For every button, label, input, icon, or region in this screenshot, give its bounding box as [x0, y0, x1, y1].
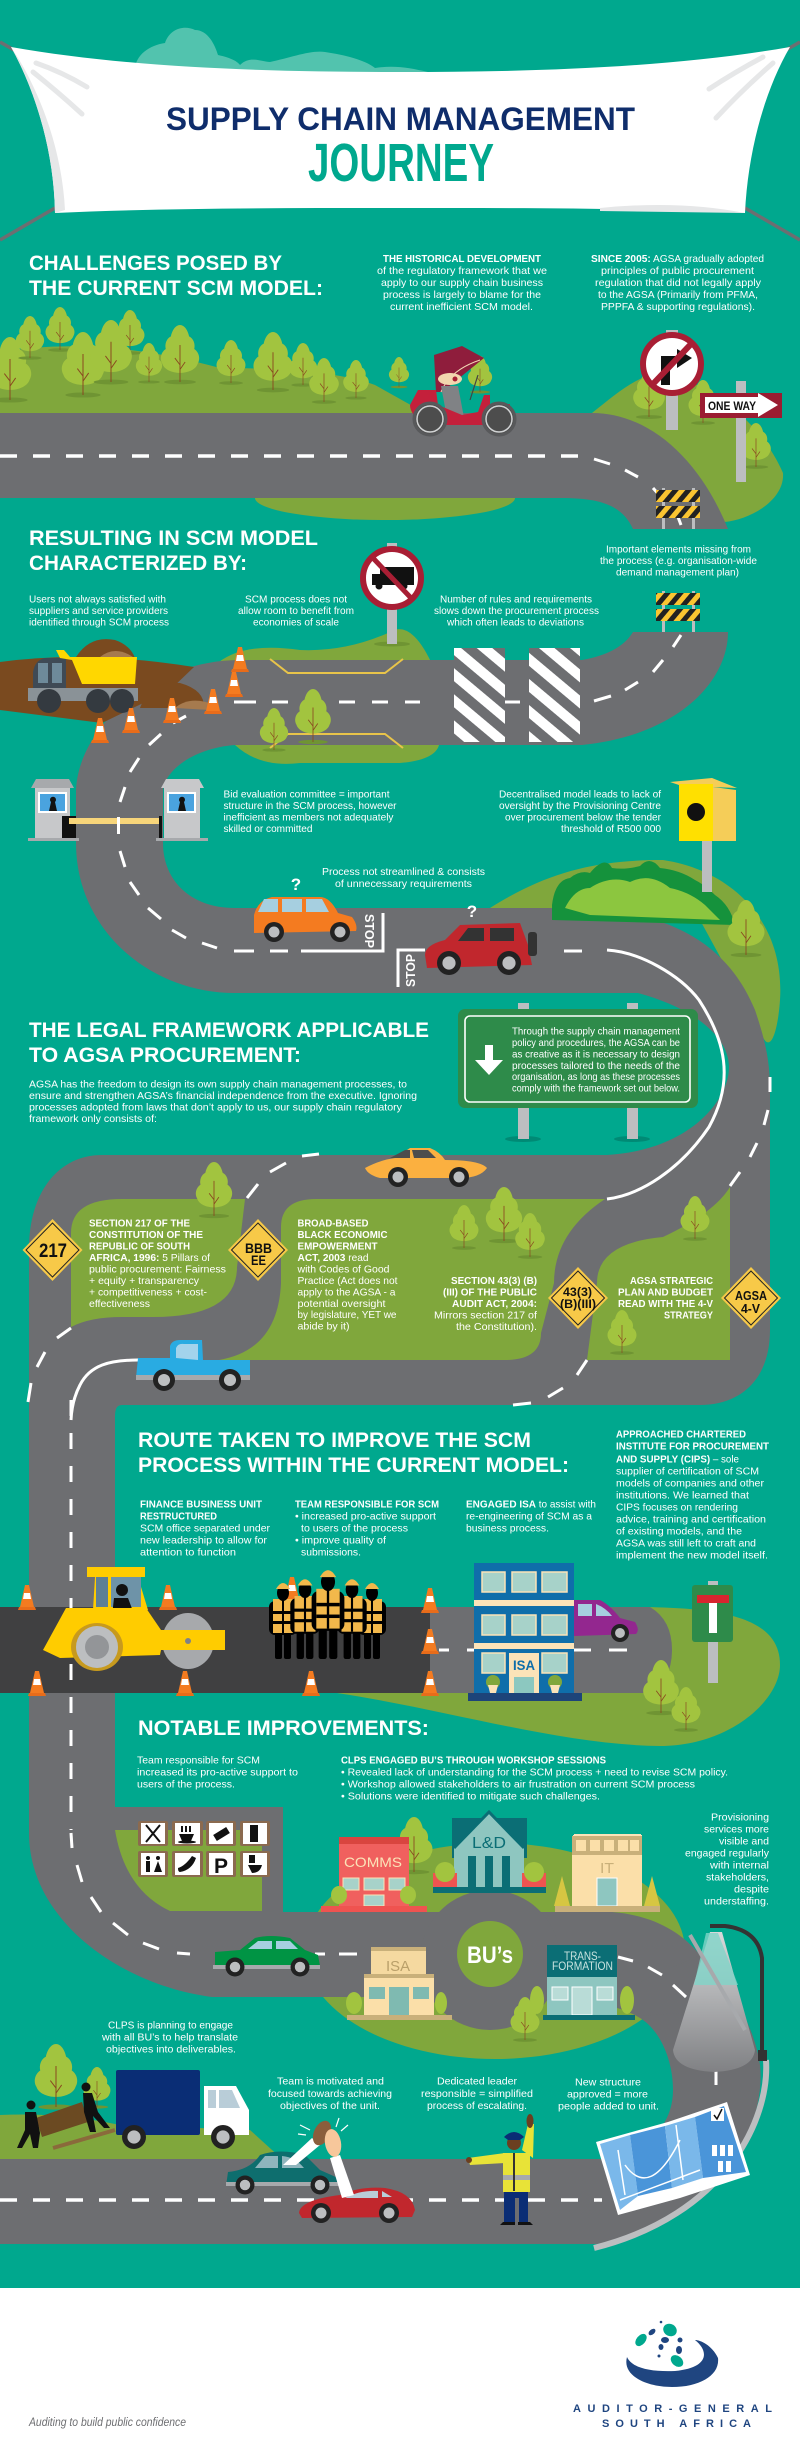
text: section 217: + competitiveness + cost-: [89, 1286, 207, 1298]
text: dedicated leader: process of escalating.: [427, 2100, 527, 2112]
text: missing elements: demand management plan): [616, 566, 739, 578]
text: decentralised: oversight by the Provisioning Centre: [499, 800, 661, 812]
text: CLPS planning: with all BU’s to help translate: [101, 2032, 238, 2044]
text: bid evaluation: inefficient as members not adequately: [224, 812, 394, 824]
text: team responsible: to users of the process: [301, 1522, 408, 1534]
green road sign: organisation, as long as these processes: [512, 1071, 680, 1083]
title: SUPPLY CHAIN MANAGEMENT: [166, 101, 635, 137]
text: economies: allow room to benefit from: [238, 605, 354, 617]
green road sign: comply with the framework set out below.: [512, 1082, 680, 1094]
text: BBBEE: BLACK ECONOMIC: [298, 1229, 388, 1241]
text: engaged ISA: [466, 1498, 596, 1534]
text: BBBEE: with Codes of Good: [297, 1264, 390, 1276]
diamond sign: AGSA 4-V: 4-V: [741, 1302, 761, 1316]
text: rules: slows down the procurement process: [434, 605, 599, 617]
text: section 43: Mirrors section 217 of: [434, 1310, 537, 1322]
diamond sign: BBBEE: EE: [251, 1252, 266, 1268]
text: CIPS: [616, 1428, 770, 1562]
BU's circle: [457, 1921, 523, 1987]
logo text: AUDITOR-GENERAL: [573, 2403, 772, 2415]
text: team responsible: • increased pro-active support: [295, 1510, 436, 1522]
text: workshop sessions: • Solutions were identified to mitigate such challenges.: [341, 1790, 600, 1802]
text: new structure: approved = more: [567, 2088, 648, 2100]
service icons: [138, 1821, 270, 1878]
text: section 217: + equity + transparency: [89, 1275, 200, 1287]
road repair stretch: [0, 1607, 430, 1693]
text: finance unit: [140, 1498, 270, 1558]
clouds: [135, 28, 428, 72]
heading: route taken: ROUTE TAKEN TO IMPROVE THE SCM: [138, 1428, 531, 1452]
diamond sign: AGSA 4-V: [721, 1267, 781, 1329]
text: since 2005: to the AGSA (Primarily from PFMA,: [598, 289, 758, 301]
heading: challenges: [29, 251, 323, 300]
text: team responsible: [295, 1498, 439, 1558]
text: not streamlined: [322, 866, 485, 890]
red jeep: ?: [467, 902, 477, 921]
ISA building: ISA: [513, 1657, 535, 1673]
text: section 43: the Constitution).: [456, 1321, 537, 1333]
stop markings: [362, 914, 418, 987]
text: CIPS: implement the new model itself.: [616, 1550, 768, 1562]
text: bid evaluation: skilled or committed: [224, 823, 313, 835]
text: bid evaluation: [224, 788, 397, 835]
text: workshop sessions: • Workshop allowed stakeholders to air frustration on current SCM process: [341, 1778, 695, 1790]
text: AGSA freedom: processes adopted from laws that don’t apply to us, our supply chain regulatory: [29, 1102, 403, 1114]
diamond sign: BBBEE: [228, 1219, 288, 1281]
text: BBBEE: EMPOWERMENT: [298, 1240, 378, 1252]
text: finance unit: new leadership to allow for: [140, 1534, 268, 1546]
pedestrian crossings: [454, 648, 580, 742]
text: provisioning: despite: [734, 1884, 769, 1896]
text: missing elements: Important elements missing from: [606, 544, 751, 556]
heading: notable improvements: NOTABLE IMPROVEMENTS:: [138, 1716, 429, 1740]
text: not streamlined: Process not streamlined & consists: [322, 866, 485, 878]
text: workshop sessions: CLPS ENGAGED BU’S THROUGH WORKSHOP SESSIONS: [341, 1754, 606, 1766]
yellow sports car: [365, 1148, 487, 1187]
text: economies: [238, 594, 354, 628]
street light: [673, 1926, 767, 2072]
speed camera: [670, 778, 737, 892]
text: engaged ISA: re-engineering of SCM as a: [466, 1510, 592, 1522]
L&D building: [433, 1812, 546, 1893]
heading: challenges: CHALLENGES POSED BY: [29, 251, 282, 275]
text: CIPS: models of companies and other: [616, 1478, 764, 1490]
rickshaw: [410, 346, 515, 435]
text: workshop sessions: [341, 1754, 728, 1802]
text: bid evaluation: structure in the SCM process, however: [224, 800, 397, 812]
orange car: ?: [291, 875, 301, 894]
text: BBBEE: by legislature, YET we: [298, 1309, 397, 1321]
ISA small building: ISA: [386, 1958, 410, 1975]
text: CIPS: institutions. We learned that: [616, 1490, 749, 1502]
logo text: [573, 2403, 772, 2430]
text: AGSA strategic plan: AGSA STRATEGIC: [630, 1275, 713, 1287]
road roller: [43, 1567, 225, 1671]
sign: one way: [700, 381, 782, 482]
text: team responsible support: increased its pro-active support to: [137, 1766, 298, 1778]
BU's circle: BU’s: [467, 1942, 513, 1969]
trees: delivery: [35, 2044, 110, 2110]
text: finance unit: RESTRUCTURED: [140, 1510, 217, 1522]
L&D building: L&D: [472, 1835, 506, 1852]
text: historical development: current inefficient SCM model.: [390, 301, 533, 313]
text: historical development: process is largely to blame for the: [383, 289, 541, 301]
trees: right of repair road: [643, 1660, 700, 1732]
road markings: [0, 456, 770, 2200]
tagline: Auditing to build public confidence: [28, 2417, 186, 2429]
logo: [626, 2321, 718, 2387]
text: bid evaluation: Bid evaluation committee = important: [224, 788, 390, 800]
text: section 217: CONSTITUTION OF THE: [89, 1229, 203, 1241]
text: team motivated: objectives of the unit.: [280, 2100, 380, 2112]
text: provisioning: visible and: [719, 1836, 769, 1848]
text: historical development: THE HISTORICAL DEVELOPMENT: [383, 253, 542, 265]
sign: no trucks: [363, 543, 421, 646]
COMMS building: COMMS: [344, 1854, 402, 1870]
text: team responsible support: Team responsible for SCM: [137, 1754, 260, 1766]
text: decentralised: threshold of R500 000: [561, 823, 661, 835]
text: provisioning: engaged regularly: [685, 1848, 770, 1860]
high five hands: [283, 2118, 354, 2198]
text: AGSA strategic plan: [618, 1275, 714, 1322]
text: CLPS planning: CLPS is planning to engage: [108, 2020, 233, 2032]
toll booths: [28, 779, 208, 841]
sign: no right turn: [643, 330, 701, 430]
text: team responsible: submissions.: [301, 1546, 361, 1558]
text: finance unit: attention to function: [140, 1546, 236, 1558]
text: new structure: New structure: [575, 2076, 641, 2088]
green road sign: [458, 1003, 698, 1142]
text: finance unit: FINANCE BUSINESS UNIT: [140, 1498, 263, 1510]
green road sign: policy and procedures, the AGSA can be: [512, 1037, 680, 1049]
green road sign: processes tailored to the needs of the: [512, 1060, 680, 1072]
heading: resulting: RESULTING IN SCM MODEL: [29, 526, 318, 550]
diamond sign: 217: [22, 1219, 82, 1281]
text: historical development: of the regulatory framework that we: [377, 265, 547, 277]
IT building: IT: [600, 1860, 614, 1877]
dump truck: [28, 639, 138, 713]
text: section 43: AUDIT ACT, 2004:: [452, 1298, 537, 1310]
blue pickup: [136, 1340, 250, 1391]
text: BBBEE: BROAD-BASED: [298, 1218, 369, 1230]
text: rules: [434, 594, 599, 628]
text: AGSA freedom: framework only consists of:: [29, 1113, 157, 1125]
teal car: [226, 2152, 339, 2194]
bushes: [552, 861, 735, 925]
text: team motivated: Team is motivated and: [277, 2076, 384, 2088]
text: section 43: (III) OF THE PUBLIC: [443, 1286, 537, 1298]
text: CLPS planning: [101, 2020, 238, 2056]
text: CLPS planning: objectives into deliverables.: [106, 2044, 236, 2056]
text: BBBEE: abide by it): [298, 1320, 350, 1332]
text: BBBEE: [297, 1218, 398, 1332]
road: first stretch: [0, 413, 728, 529]
text: historical development: [377, 253, 547, 313]
diamond sign: AGSA 4-V: AGSA: [735, 1289, 767, 1303]
diamond sign: 217: 217: [39, 1241, 67, 1262]
text: users: [29, 594, 169, 628]
construction workers: [269, 1570, 386, 1659]
title: JOURNEY: [308, 133, 494, 193]
green road sign: Through the supply chain management: [512, 1026, 680, 1038]
text: since 2005: regulation that did not legally apply: [595, 277, 762, 289]
text: rules: which often leads to deviations: [446, 616, 584, 628]
heading: route taken: [138, 1428, 569, 1477]
cones: road repair: [18, 1577, 439, 1696]
heading: challenges: THE CURRENT SCM MODEL:: [29, 276, 323, 300]
orange car: [254, 875, 356, 942]
text: users: identified through SCM process: [29, 616, 169, 628]
red sports car: [299, 2188, 415, 2223]
text: decentralised: Decentralised model leads to lack of: [499, 788, 661, 800]
text: provisioning: stakeholders,: [706, 1872, 769, 1884]
ISA small building: [346, 1947, 452, 2020]
heading: legal framework: THE LEGAL FRAMEWORK APPLICABLE: [29, 1018, 429, 1042]
BU ring road: [420, 1890, 720, 2030]
text: CIPS: AGSA was still left to craft and: [616, 1538, 756, 1550]
Transformation building: FORMATION: [552, 1961, 613, 1973]
heading: legal framework: [29, 1018, 429, 1067]
text: CIPS: of existing models, and the: [616, 1526, 742, 1538]
title: [166, 101, 635, 193]
trees: first section: [0, 307, 771, 469]
text: provisioning: understaffing.: [704, 1896, 769, 1908]
text: dedicated leader: responsible = simplified: [421, 2088, 533, 2100]
ISA building: [468, 1563, 582, 1701]
text: section 217: [89, 1218, 226, 1310]
text: section 217: effectiveness: [89, 1298, 150, 1310]
purple car: [574, 1600, 638, 1642]
text: engaged ISA: business process.: [466, 1522, 549, 1534]
text: section 43: SECTION 43(3) (B): [451, 1275, 537, 1287]
text: new structure: [558, 2076, 659, 2112]
text: engaged ISA: ENGAGED ISA to assist with: [466, 1498, 596, 1510]
text: new structure: people added to unit.: [558, 2100, 659, 2112]
text: dedicated leader: Dedicated leader: [437, 2076, 518, 2088]
diamond sign: 43(3): 43(3): [563, 1285, 592, 1299]
text: decentralised: over procurement below the tender: [505, 812, 661, 824]
text: workshop sessions: • Revealed lack of understanding for the SCM process + need to revise SCM policy.: [341, 1766, 728, 1778]
sign: one way: ONE WAY: [708, 399, 756, 413]
text: AGSA strategic plan: PLAN AND BUDGET: [618, 1286, 714, 1298]
text: AGSA freedom: AGSA has the freedom to design its own supply chain management processes, to: [29, 1078, 407, 1090]
trees on median: [260, 689, 331, 752]
text: team responsible: • improve quality of: [295, 1534, 386, 1546]
text: section 217: SECTION 217 OF THE: [89, 1218, 190, 1230]
map: [596, 2102, 750, 2215]
logo text: SOUTH AFRICA: [602, 2418, 751, 2430]
text: dedicated leader: [421, 2076, 533, 2112]
text: AGSA strategic plan: READ WITH THE 4-V: [618, 1298, 713, 1310]
text: not streamlined: of unnecessary requirements: [335, 878, 472, 890]
text: since 2005: SINCE 2005: AGSA gradually adopted: [591, 253, 764, 265]
service icons: P: [214, 1855, 228, 1878]
text: CIPS: INSTITUTE FOR PROCUREMENT: [616, 1440, 770, 1452]
cones: roadworks: [91, 647, 249, 743]
road sign with no entry bar: [692, 1581, 733, 1683]
text: missing elements: the process (e.g. organisation-wide: [600, 555, 757, 567]
text: BBBEE: apply to the AGSA - a: [298, 1286, 396, 1298]
text: provisioning: [685, 1812, 770, 1908]
heading: legal framework: TO AGSA PROCUREMENT:: [29, 1043, 301, 1067]
text: team responsible support: [137, 1754, 298, 1790]
red jeep: [425, 902, 537, 975]
text: economies: economies of scale: [253, 616, 339, 628]
Transformation building: [530, 1945, 635, 2020]
text: BBBEE: Practice (Act does not: [298, 1275, 398, 1287]
heading: route taken: PROCESS WITHIN THE CURRENT MODEL:: [138, 1453, 569, 1477]
text: BBBEE: ACT, 2003 read: [298, 1252, 369, 1264]
traffic officer: [466, 2114, 534, 2225]
text: missing elements: [600, 544, 757, 578]
text: team motivated: [268, 2076, 392, 2112]
text: BBBEE: potential oversight: [298, 1298, 386, 1310]
text: CIPS: advice, training and certification: [616, 1514, 766, 1526]
green hills under roads: [0, 346, 783, 2160]
stop markings: STOP: [404, 954, 418, 987]
text: AGSA freedom: ensure and strengthen AGSA’s financial independence from the executive. Ignoring: [29, 1090, 417, 1102]
text: decentralised: [499, 788, 661, 835]
text: provisioning: with internal: [709, 1860, 769, 1872]
COMMS building: [321, 1817, 433, 1912]
text: AGSA freedom: [29, 1078, 417, 1125]
text: users: Users not always satisfied with: [29, 594, 166, 606]
text: CIPS: AND SUPPLY (CIPS) – sole: [616, 1454, 739, 1466]
banner: [0, 42, 800, 240]
green road sign: as creative as it is necessary to design: [512, 1048, 680, 1060]
delivery truck with movers: [17, 2070, 249, 2149]
green car: [213, 1936, 320, 1976]
diamond sign: BBBEE: BBB: [245, 1240, 272, 1256]
dirt: [0, 657, 215, 723]
text: since 2005: principles of public procurement: [601, 265, 754, 277]
trees: legal framework: [196, 1162, 709, 1355]
stop markings: STOP: [362, 914, 376, 948]
text: economies: SCM process does not: [245, 594, 347, 606]
text: section 43: [434, 1275, 537, 1333]
text: finance unit: SCM office separated under: [140, 1522, 270, 1534]
heading: resulting: CHARACTERIZED BY:: [29, 551, 247, 575]
text: since 2005: PPPFA & supporting regulations).: [601, 301, 755, 313]
road block 2: [656, 591, 700, 632]
text: provisioning: services more: [704, 1824, 769, 1836]
IT building: [554, 1835, 660, 1912]
diamond sign: 43(3): (B)(III): [560, 1297, 596, 1311]
Transformation building: TRANS-: [564, 1951, 601, 1963]
text: CIPS: CIPS focuses on rendering: [616, 1502, 738, 1514]
text: since 2005: [591, 253, 764, 313]
text: users: suppliers and service providers: [29, 605, 168, 617]
text: team motivated: focused towards achieving: [268, 2088, 392, 2100]
diamond sign: 43(3): [548, 1267, 608, 1329]
text: section 217: public procurement: Fairness: [89, 1264, 226, 1276]
text: team responsible: TEAM RESPONSIBLE FOR SCM: [295, 1498, 439, 1510]
text: section 217: AFRICA, 1996: 5 Pillars of: [89, 1252, 210, 1264]
grass inside legal framework section: [71, 1187, 730, 1911]
road kerb: [594, 2060, 766, 2248]
text: rules: Number of rules and requirements: [440, 594, 592, 606]
text: section 217: REPUBLIC OF SOUTH: [89, 1240, 190, 1252]
text: AGSA strategic plan: STRATEGY: [664, 1310, 713, 1322]
heading: resulting: [29, 526, 318, 575]
text: team responsible support: users of the process.: [137, 1778, 235, 1790]
text: CIPS: APPROACHED CHARTERED: [616, 1428, 746, 1440]
text: CIPS: supplier of certification of SCM: [616, 1466, 759, 1478]
text: provisioning: Provisioning: [711, 1812, 769, 1824]
road: main serpentine: [0, 632, 770, 2244]
text: historical development: apply to our supply chain business: [381, 277, 543, 289]
road block 1: [656, 488, 700, 529]
